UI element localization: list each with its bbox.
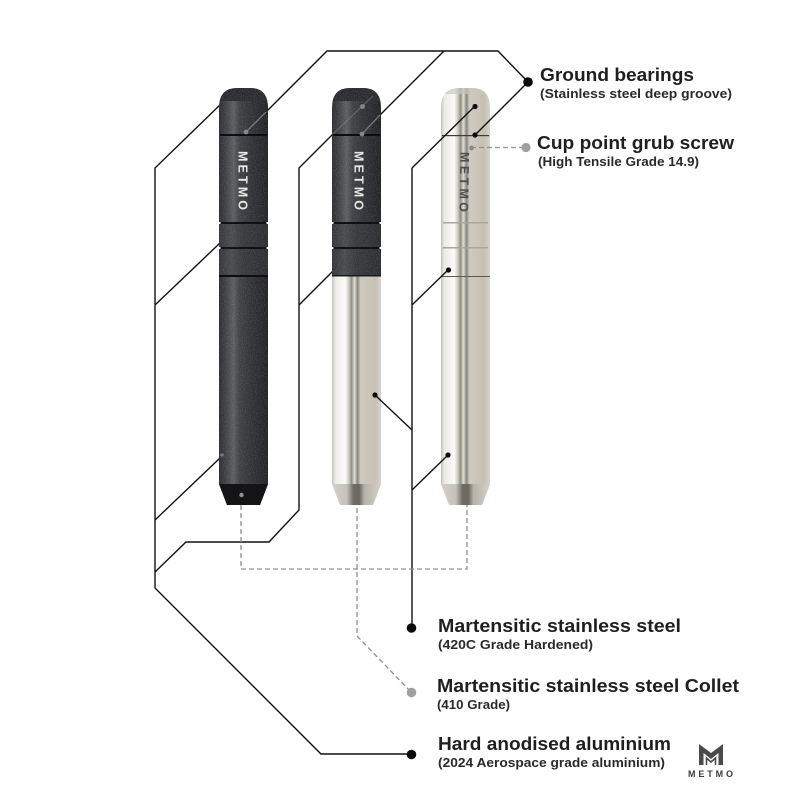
label: Martensitic stainless steel Collet: (410 Grade) [437,698,510,712]
label: Cup point grub screw: Cup point grub screw [537,133,735,153]
leader lines behind the pens [155,51,528,754]
engraved METMO mark: METMO [236,151,250,210]
dashed line: grub screw [471,146,526,148]
dashed leader lines [241,497,467,692]
label: Martensitic stainless steel Collet [407,676,739,712]
label: Ground bearings: (Stainless steel deep groove) [540,87,732,101]
pen: black anodised [219,88,268,505]
faint leader lines over dark pens [246,96,380,134]
label: Ground bearings: Ground bearings [540,65,694,85]
label: Martensitic stainless steel Collet: Martensitic stainless steel Collet [437,676,739,696]
label: Martensitic stainless steel [407,616,681,652]
small marker dots on pens [220,104,478,497]
pen: black with steel body [332,88,381,505]
infographic [154,50,739,777]
engraved METMO mark: METMO [456,152,471,212]
label: Martensitic stainless steel: Martensitic stainless steel [438,616,681,636]
leader lines over steel pens [375,82,528,490]
label: Ground bearings [523,65,732,101]
label: Cup point grub screw [521,133,735,169]
label: Hard anodised aluminium: Hard anodised aluminium [438,734,671,754]
logo: METMO [688,744,733,779]
engraved METMO mark: METMO [352,151,366,210]
logo: METMO: METMO [688,769,733,779]
label: Cup point grub screw: (High Tensile Grade 14.9) [538,155,699,169]
label: Hard anodised aluminium: (2024 Aerospace grade aluminium) [438,756,665,770]
label: Martensitic stainless steel: (420C Grade Hardened) [438,638,593,652]
label: Hard anodised aluminium [407,734,671,770]
pen: stainless steel [441,88,490,505]
